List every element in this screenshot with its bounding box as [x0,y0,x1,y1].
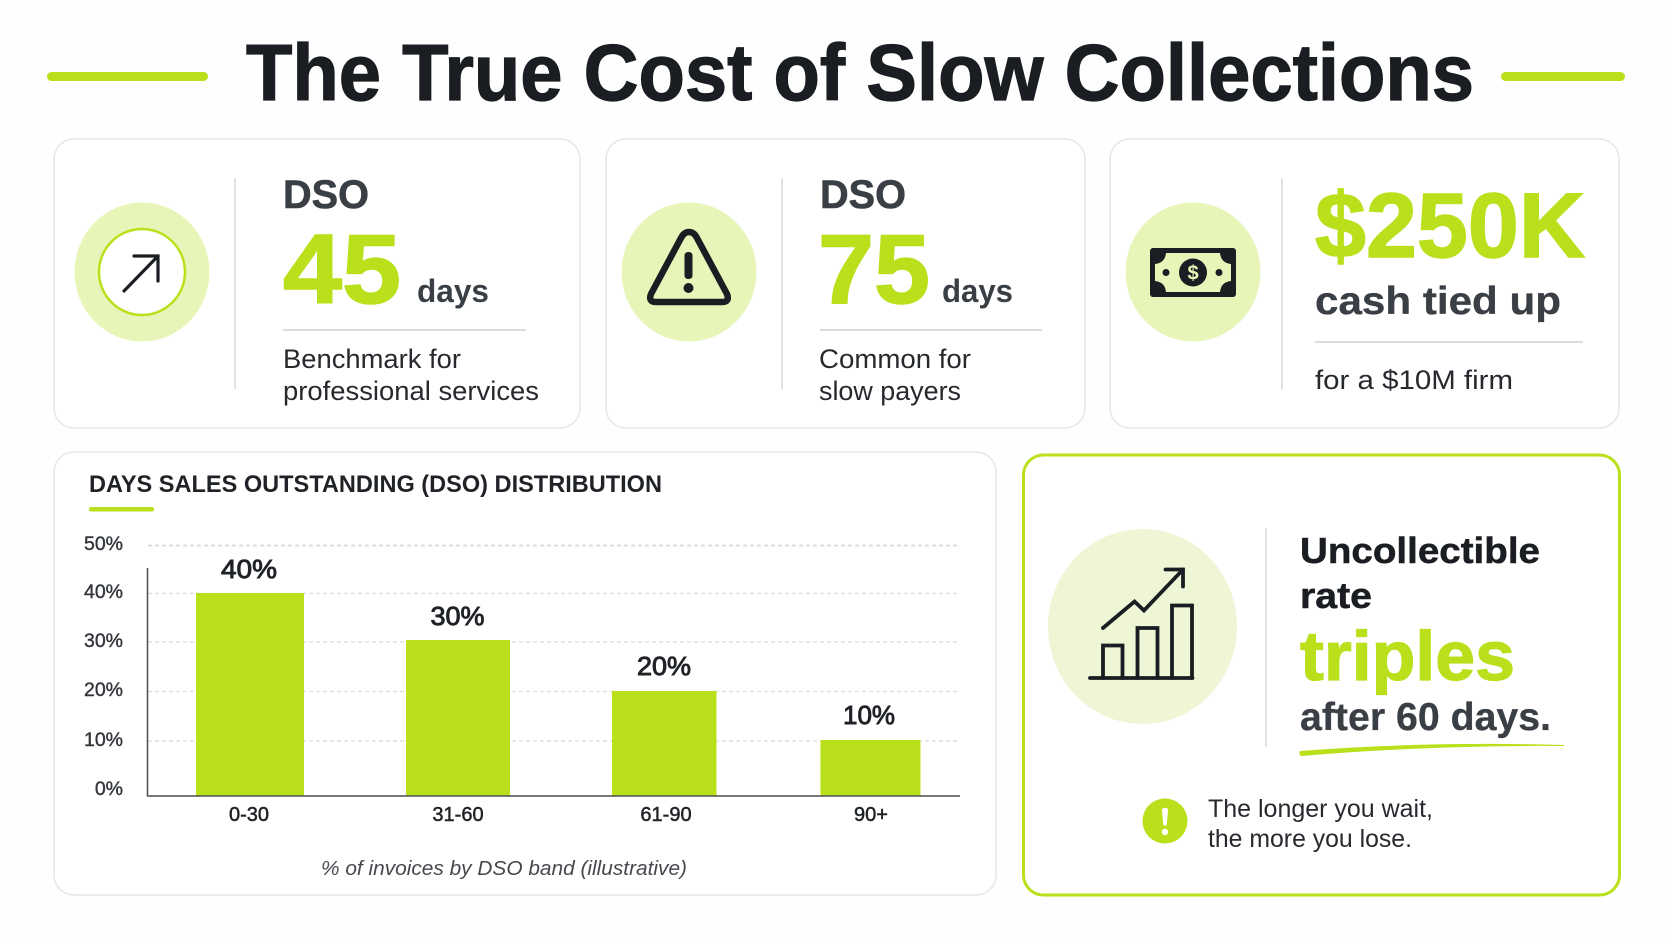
description: slow payers: slow payers [819,376,961,406]
y axis labels: 20% [84,679,123,701]
icon: arrow up-right in circle [74,202,210,342]
chart caption: % of invoices by DSO band (illustrative) [321,857,687,880]
category labels: 90+ [854,804,888,826]
description: firm size: for a $10M firm [1315,365,1513,395]
value: 75: 75 [818,214,930,324]
value: $250K: $250K [1315,175,1585,277]
bars [196,593,920,796]
y axis labels: 10% [84,729,123,751]
description: slow payers [819,344,971,406]
panel: $250K cash tied up [1110,139,1619,428]
category labels [229,804,888,826]
chart heading: DAYS SALES OUTSTANDING (DSO) DISTRIBUTION [89,471,662,498]
bar value labels: 40% [221,554,277,584]
description: slow payers: Common for [819,344,971,374]
category labels: 61-90 [640,804,692,826]
y axis labels: 50% [84,533,123,555]
icon: banknote: $ [1187,262,1199,284]
bar value labels [221,554,895,730]
description: benchmark: Benchmark for [283,344,461,374]
headline: after 60 days: after 60 days. [1300,696,1551,739]
panel: uncollectible rate callout [1024,455,1620,895]
description: benchmark [283,344,539,406]
note: the longer you wait [1208,795,1433,853]
icon: alert circle [1142,798,1188,844]
value: 45: 45 [283,214,401,324]
title: The True Cost of Slow Collections [246,28,1474,117]
y axis labels: 30% [84,630,123,652]
panel: DSO 75 days [606,139,1085,428]
note: the longer you wait: The longer you wait, [1208,795,1433,823]
category labels: 0-30 [229,804,269,826]
y axis labels [84,533,123,800]
bar chart [84,533,960,826]
unit: days: days [417,273,489,309]
label: DSO: DSO [283,173,369,217]
chart heading [89,471,662,512]
unit: days: days [942,273,1013,309]
icon: warning triangle [622,202,756,342]
underline swoosh [1299,744,1564,756]
label: DSO: DSO [820,173,906,217]
headline: uncollectible rate [1300,530,1540,616]
panel: DSO 45 days [54,139,580,428]
headline: uncollectible rate: rate [1300,575,1372,616]
note: the longer you wait: the more you lose. [1208,825,1412,853]
description: benchmark: professional services [283,376,539,406]
label: cash tied up: cash tied up [1315,280,1561,323]
panel: DSO distribution chart [54,452,996,895]
bar value labels: 30% [430,601,484,631]
bar value labels: 10% [843,700,895,730]
y axis labels: 40% [84,581,123,603]
headline: uncollectible rate: Uncollectible [1300,530,1540,571]
y axis labels: 0% [95,778,123,800]
bar value labels: 20% [637,651,691,681]
emphasis: triples: triples [1300,617,1515,695]
category labels: 31-60 [432,804,484,826]
icon: rising bar chart [1048,529,1237,724]
icon: banknote [1126,202,1260,342]
